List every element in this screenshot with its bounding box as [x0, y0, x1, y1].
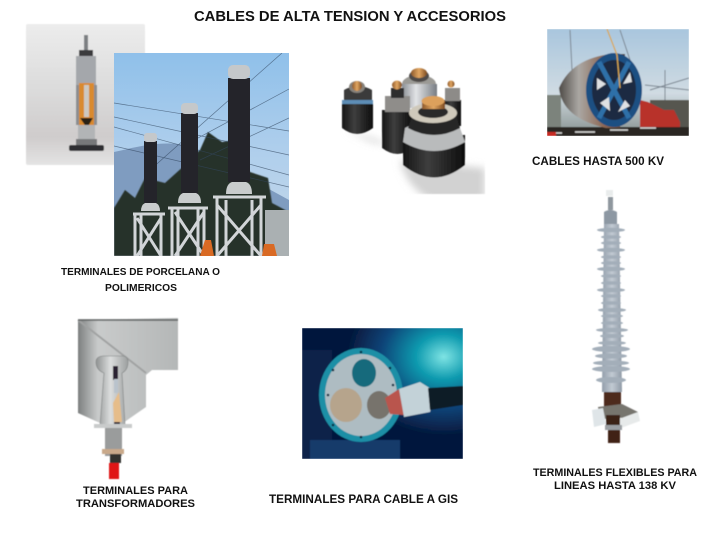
- caption: flexible terminals for lines up to 138 kV: TERMINALES FLEXIBLES PARA: [533, 467, 697, 479]
- caption: flexible terminals for lines up to 138 kV: LINEAS HASTA 138 KV: [554, 480, 677, 492]
- cable small right: [444, 80, 461, 126]
- illustration: flexible line terminal: [592, 190, 640, 443]
- workers: [200, 240, 277, 256]
- flange: [586, 53, 642, 127]
- cable left: [342, 81, 373, 134]
- caption: transformer terminals: TERMINALES PARA: [83, 485, 188, 497]
- caption: transformer terminals: [76, 485, 195, 510]
- cable middle: [382, 80, 412, 154]
- terminal 2: [178, 103, 201, 203]
- shadow: [345, 130, 485, 200]
- lattice supports: [133, 197, 266, 256]
- crane sling: [607, 29, 620, 88]
- cable connector: [385, 389, 404, 415]
- cable front: [403, 96, 465, 178]
- flange: [319, 348, 403, 442]
- wires: [114, 53, 289, 187]
- photo: cable samples: [342, 68, 485, 200]
- caption: porcelain or polymeric terminals: POLIMERICOS: [105, 283, 177, 294]
- caption: flexible terminals for lines up to 138 kV: [533, 467, 697, 492]
- caption: transformer terminals: TRANSFORMADORES: [76, 498, 195, 510]
- photo: three terminals outdoors: [114, 53, 289, 256]
- cable far back: [402, 68, 437, 108]
- photo: cable reel on truck: [547, 29, 689, 136]
- photo: porcelain terminal cutaway: [26, 24, 145, 165]
- illustration: transformer terminal: [78, 318, 178, 479]
- trees: [114, 132, 289, 256]
- ports: [352, 359, 376, 387]
- caption: cables up to 500 kV: CABLES HASTA 500 KV: [532, 154, 664, 168]
- drum: [559, 54, 625, 128]
- bolts: [327, 351, 394, 438]
- mountain: [114, 144, 289, 230]
- caption: GIS cable terminals: TERMINALES PARA CABLE A GIS: [269, 492, 458, 506]
- caption: porcelain or polymeric terminals: [61, 267, 220, 294]
- terminal 1: [141, 133, 160, 211]
- caption: porcelain or polymeric terminals: TERMINALES DE PORCELANA O: [61, 267, 220, 278]
- terminal 3: [226, 65, 252, 194]
- title: CABLES DE ALTA TENSION Y ACCESORIOS: [194, 9, 506, 25]
- photo: GIS cable terminal: [302, 328, 463, 459]
